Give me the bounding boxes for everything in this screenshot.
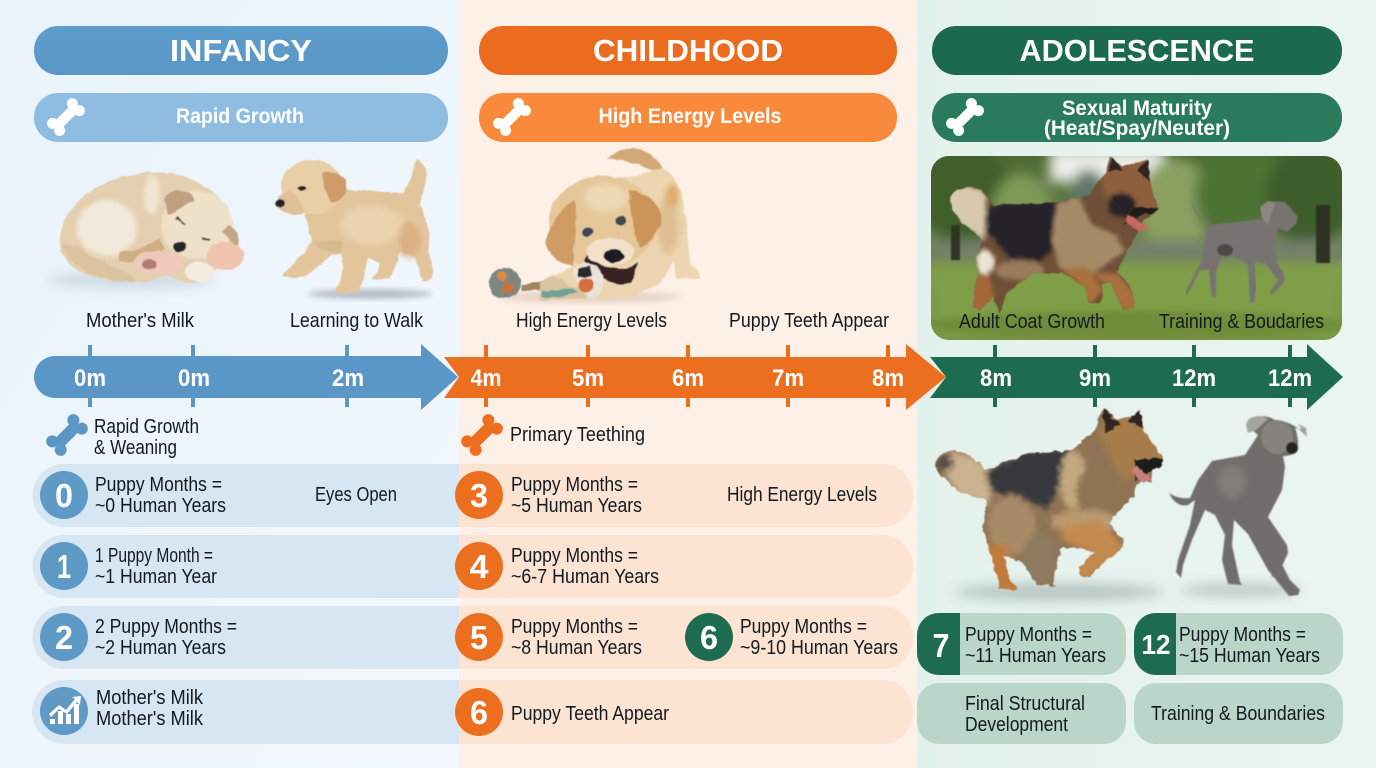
row: 4 months: ~6-7 Human Years bbox=[511, 566, 659, 588]
row: 5 and 6 months: ~9-10 Human Years bbox=[740, 637, 898, 659]
illustration: weimaraner running bbox=[1169, 416, 1307, 597]
illustration: walking puppy bbox=[276, 160, 432, 299]
row: 1 month: 1 bbox=[57, 548, 71, 585]
row: 1 month bbox=[33, 535, 459, 598]
label: mother's milk: Mother's Milk bbox=[86, 310, 195, 332]
banner: sexual maturity: (Heat/Spay/Neuter) bbox=[1044, 117, 1230, 140]
row: 1 month: 1 Puppy Month = bbox=[95, 545, 213, 567]
illustration: sleeping newborn puppy bbox=[45, 173, 244, 288]
label: learning to walk: Learning to Walk bbox=[290, 310, 424, 332]
row: 2 months: 2 bbox=[55, 619, 73, 656]
card: training and boundaries: Training & Boundaries bbox=[1151, 703, 1325, 725]
banner: sexual maturity bbox=[932, 93, 1342, 142]
panel: adolescence milestone cards bbox=[917, 613, 1343, 744]
heading: adolescence: ADOLESCENCE bbox=[1020, 33, 1254, 68]
card: training and boundaries bbox=[1134, 683, 1343, 744]
arrow: infancy timeline: 0m bbox=[178, 365, 210, 392]
row: 2 months bbox=[33, 606, 459, 669]
illustration: teething puppy with rope toy bbox=[489, 148, 700, 303]
row: 5 and 6 months: Puppy Months = bbox=[511, 616, 638, 638]
label: high energy levels: High Energy Levels bbox=[516, 310, 667, 332]
row: 0 months: 0 bbox=[55, 477, 73, 514]
row: mother's milk bbox=[32, 680, 459, 744]
row: 3 months: High Energy Levels bbox=[727, 484, 877, 506]
row: puppy teeth appear bbox=[455, 680, 913, 744]
row: 4 months bbox=[455, 535, 913, 598]
arrow: childhood timeline: 4m bbox=[470, 365, 502, 392]
note: rapid growth and weaning: & Weaning bbox=[94, 437, 177, 459]
arrow: adolescence timeline bbox=[930, 344, 1343, 410]
row: 0 months: Eyes Open bbox=[315, 484, 397, 506]
icon: growth chart bbox=[49, 696, 81, 724]
arrow: adolescence timeline: 12m bbox=[1268, 365, 1312, 392]
card: 7 months: Puppy Months = bbox=[965, 624, 1092, 646]
row: 3 months bbox=[455, 464, 913, 527]
arrow: childhood timeline: 8m bbox=[872, 365, 904, 392]
heading: childhood: CHILDHOOD bbox=[593, 33, 783, 68]
row: puppy teeth appear: Puppy Teeth Appear bbox=[511, 703, 669, 725]
panel: infancy background bbox=[0, 0, 459, 768]
heading: infancy bbox=[34, 26, 448, 75]
banner: high energy levels bbox=[479, 93, 897, 142]
row: 2 months: 2 Puppy Months = bbox=[95, 616, 237, 638]
arrow: adolescence timeline: 9m bbox=[1079, 365, 1111, 392]
banner: rapid growth bbox=[34, 93, 448, 142]
arrow: infancy timeline: 0m bbox=[74, 365, 106, 392]
row: mother's milk: Mother's Milk bbox=[96, 687, 204, 709]
label: adult coat growth: Adult Coat Growth bbox=[959, 311, 1105, 333]
row: 5 and 6 months: 5 bbox=[470, 619, 488, 656]
row: mother's milk: Mother's Milk bbox=[96, 708, 204, 730]
arrow: childhood timeline: 6m bbox=[672, 365, 704, 392]
label: training and boudaries: Training & Boudaries bbox=[1159, 311, 1324, 333]
card: final structural development: Development bbox=[965, 714, 1068, 736]
heading: infancy: INFANCY bbox=[170, 33, 312, 68]
arrow: adolescence timeline: 12m bbox=[1172, 365, 1216, 392]
row: 0 months: ~0 Human Years bbox=[95, 495, 226, 517]
row: 5 and 6 months: ~8 Human Years bbox=[511, 637, 642, 659]
illustration: park photo with two adult dogs bbox=[931, 156, 1342, 340]
note: rapid growth and weaning: Rapid Growth bbox=[94, 416, 199, 438]
panel: childhood background bbox=[459, 0, 917, 768]
row: 3 months: 3 bbox=[470, 477, 488, 514]
panel: childhood milestone rows bbox=[455, 464, 913, 744]
arrow: childhood timeline: 5m bbox=[572, 365, 604, 392]
row: 0 months bbox=[33, 464, 459, 527]
card: 12 months: ~15 Human Years bbox=[1179, 645, 1320, 667]
note: primary teething: Primary Teething bbox=[510, 424, 645, 446]
row: 4 months: 4 bbox=[470, 548, 489, 585]
row: 0 months: Puppy Months = bbox=[95, 474, 222, 496]
panel: adolescence background bbox=[917, 0, 1376, 768]
illustration: german shepherd running bbox=[930, 408, 1168, 601]
card: final structural development bbox=[917, 683, 1126, 744]
arrow: childhood timeline bbox=[444, 344, 946, 410]
row: 4 months: Puppy Months = bbox=[511, 545, 638, 567]
row: 5 and 6 months: Puppy Months = bbox=[740, 616, 867, 638]
banner: rapid growth: Rapid Growth bbox=[176, 105, 304, 128]
card: 7 months bbox=[917, 613, 1126, 675]
heading: adolescence bbox=[932, 26, 1342, 75]
arrow: infancy timeline bbox=[34, 344, 458, 410]
heading: childhood bbox=[479, 26, 897, 75]
row: 5 and 6 months bbox=[455, 606, 913, 669]
card: 7 months: 7 bbox=[932, 627, 950, 664]
row: 5 and 6 months: 6 bbox=[700, 619, 718, 656]
banner: sexual maturity: Sexual Maturity bbox=[1062, 97, 1212, 120]
arrow: childhood timeline: 7m bbox=[772, 365, 804, 392]
card: 7 months: ~11 Human Years bbox=[965, 645, 1106, 667]
arrow: adolescence timeline: 8m bbox=[980, 365, 1012, 392]
row: 3 months: ~5 Human Years bbox=[511, 495, 642, 517]
arrow: infancy timeline: 2m bbox=[332, 365, 364, 392]
card: 12 months bbox=[1134, 613, 1343, 675]
note: rapid growth and weaning bbox=[44, 412, 199, 459]
card: final structural development: Final Structural bbox=[965, 693, 1085, 715]
label: puppy teeth appear: Puppy Teeth Appear bbox=[729, 310, 889, 332]
row: puppy teeth appear: 6 bbox=[470, 694, 488, 731]
card: 12 months: Puppy Months = bbox=[1179, 624, 1306, 646]
panel: infancy milestone rows bbox=[32, 464, 459, 744]
row: 1 month: ~1 Human Year bbox=[95, 566, 217, 588]
banner: high energy levels: High Energy Levels bbox=[598, 105, 782, 128]
row: 3 months: Puppy Months = bbox=[511, 474, 638, 496]
card: 12 months: 12 bbox=[1142, 629, 1170, 660]
row: 2 months: ~2 Human Years bbox=[95, 637, 226, 659]
note: primary teething bbox=[459, 412, 645, 458]
